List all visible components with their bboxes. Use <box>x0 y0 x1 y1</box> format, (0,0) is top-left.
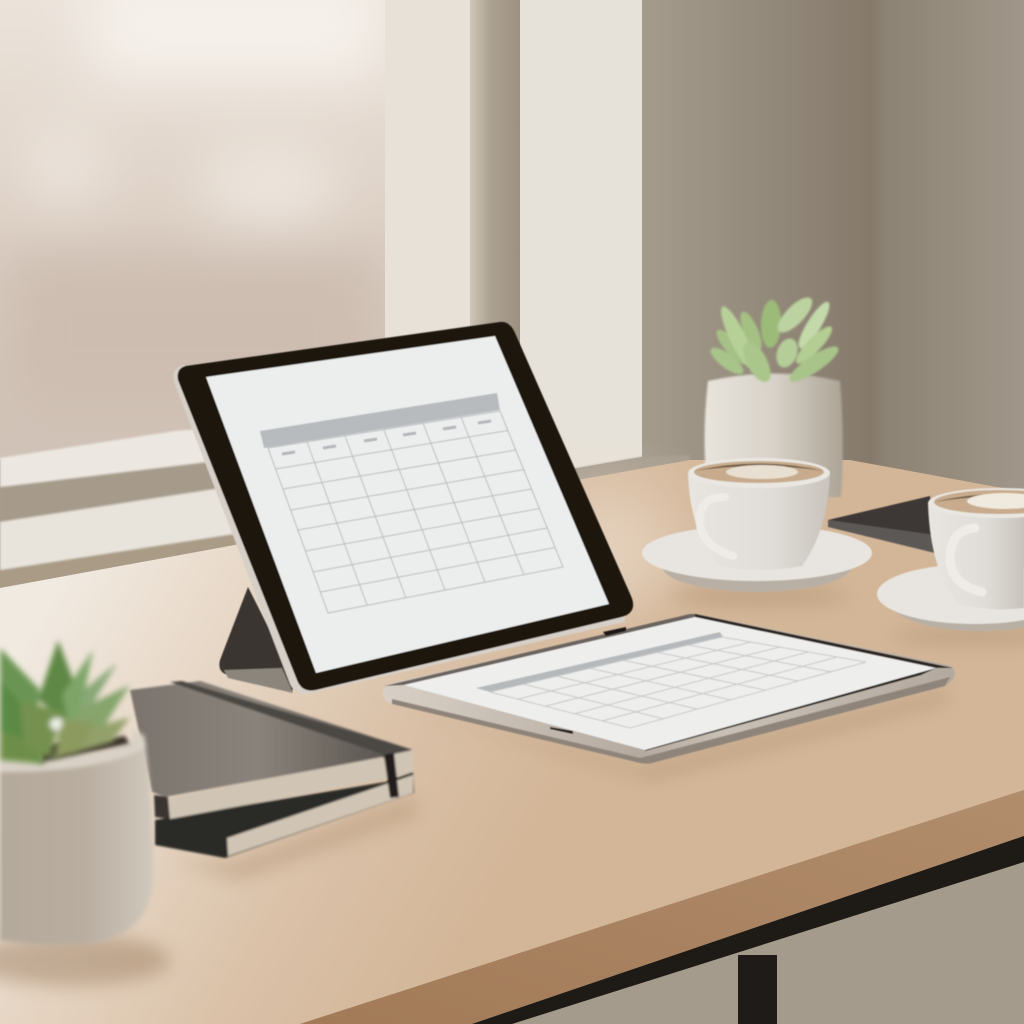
succulent leaves <box>0 640 130 764</box>
window with blurred view <box>0 0 385 460</box>
calendar header <box>476 632 723 692</box>
wall below table <box>300 820 1024 1024</box>
silver body <box>383 614 955 763</box>
coffee cup, centre <box>688 458 830 570</box>
tablet body <box>178 322 633 691</box>
camera marks <box>550 627 626 734</box>
flat tablet <box>383 614 955 764</box>
elastic strap top <box>170 681 412 756</box>
plant in white pot, right <box>704 292 843 497</box>
silver edge <box>173 365 625 693</box>
saucer, centre cup <box>642 525 872 592</box>
background wall <box>642 0 1024 1024</box>
dark bezel lines <box>384 614 953 686</box>
screen <box>404 617 936 750</box>
smartphone behind cups <box>828 496 935 553</box>
coffee cup, right <box>928 488 1024 609</box>
upper notebook pages <box>168 757 384 819</box>
calendar grid <box>268 411 563 613</box>
table light reflection <box>540 490 680 610</box>
pot <box>0 729 153 945</box>
shadows on table <box>0 586 1024 986</box>
table frame and leg <box>472 836 1024 1024</box>
table front edge <box>300 790 1024 1024</box>
saucer, right cup <box>877 564 1024 631</box>
lower notebook <box>155 772 414 858</box>
weekday labels <box>282 421 491 454</box>
succulent leaves <box>707 292 843 387</box>
screen <box>206 336 609 673</box>
calendar grid <box>490 637 866 728</box>
table top <box>0 460 1024 1024</box>
window frame <box>385 0 690 480</box>
pot <box>704 374 843 497</box>
elastic strap front <box>384 753 399 798</box>
calendar header <box>260 393 500 448</box>
window sill <box>0 428 240 589</box>
tablet on stand <box>173 322 633 693</box>
upper notebook cover <box>130 681 413 797</box>
plant in grey pot, left foreground <box>0 640 153 945</box>
folding stand <box>219 587 295 692</box>
notebooks <box>130 681 414 858</box>
